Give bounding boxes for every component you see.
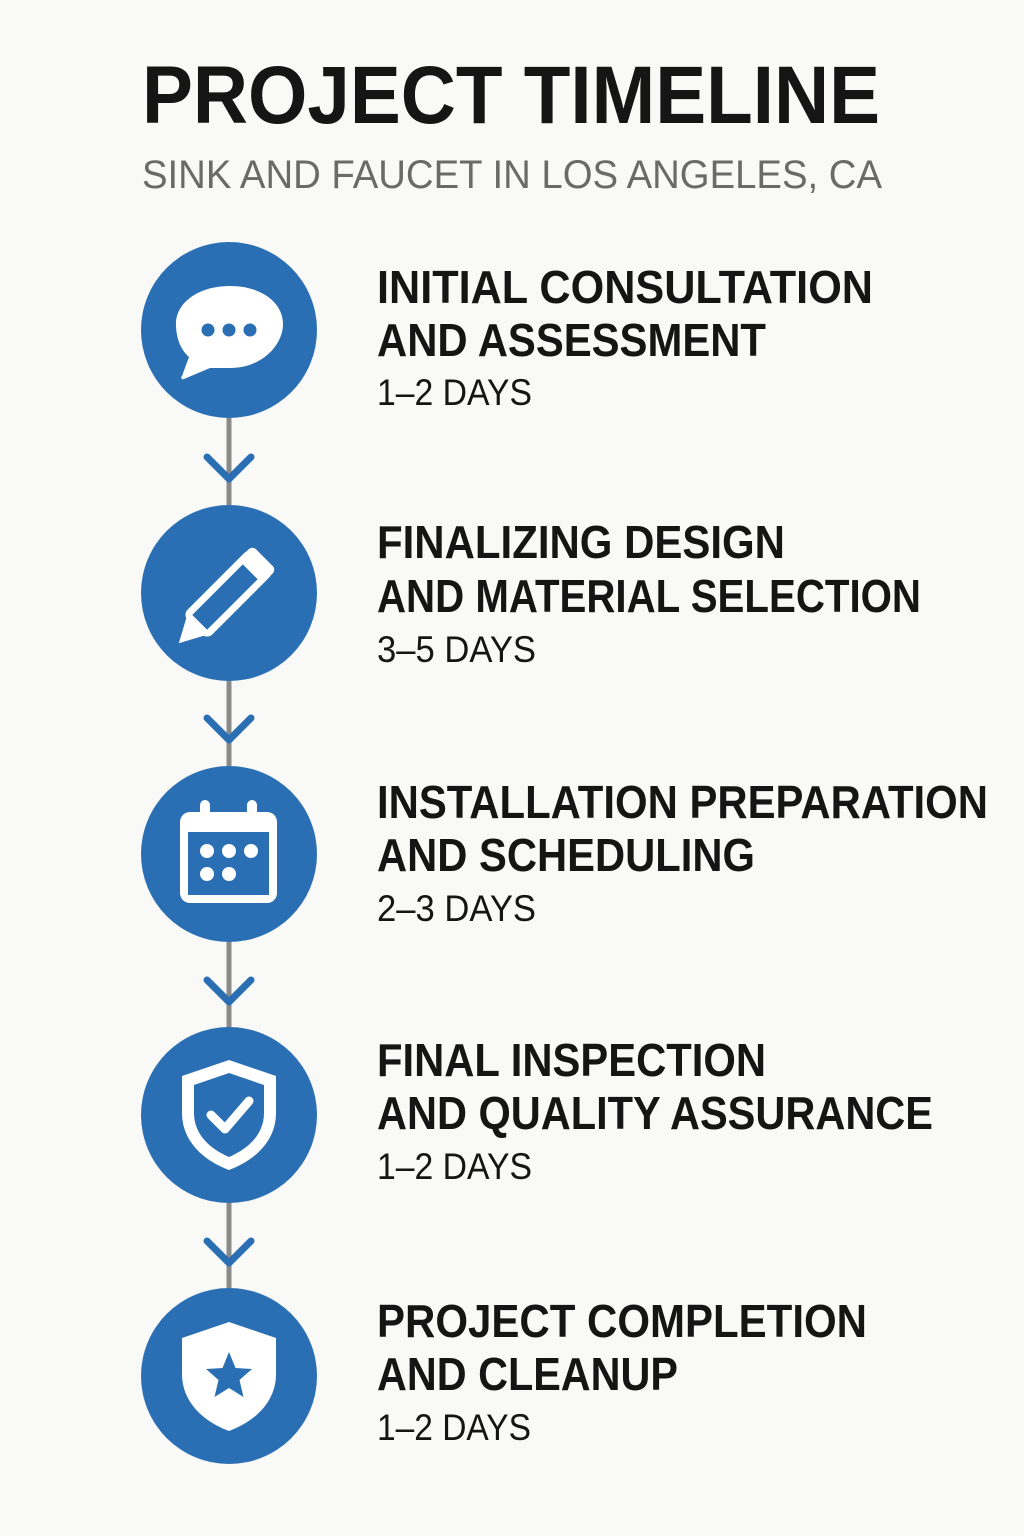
text: step 4: 1–2 DAYS (377, 1146, 532, 1187)
connectors and arrows (226, 418, 232, 1288)
step 3 (141, 766, 988, 942)
text: step 2: 3–5 DAYS (377, 629, 536, 670)
arrow 2 (207, 718, 251, 740)
text: step 1: INITIAL CONSULTATION (377, 261, 873, 313)
text: step 5: AND CLEANUP (377, 1348, 678, 1400)
text: step 5: PROJECT COMPLETION (377, 1295, 867, 1347)
text: step 4 (377, 1034, 933, 1187)
subtitle: SINK AND FAUCET IN LOS ANGELES, CA (142, 153, 882, 197)
text: step 5 (377, 1295, 867, 1448)
arrow 1 (207, 457, 251, 479)
text: step 4: AND QUALITY ASSURANCE (377, 1087, 933, 1139)
text: step 2: FINALIZING DESIGN (377, 516, 785, 568)
icon: shield star (141, 1288, 317, 1464)
icon: chat bubble (141, 242, 317, 418)
text: step 5: 1–2 DAYS (377, 1407, 531, 1448)
text: step 3 (377, 776, 988, 929)
step 4 (141, 1027, 933, 1203)
title: PROJECT TIMELINE (142, 50, 880, 141)
text: step 1: AND ASSESSMENT (377, 314, 766, 366)
icon: shield check (141, 1027, 317, 1203)
text: step 1 (377, 261, 873, 413)
arrow 4 (207, 1241, 251, 1263)
icon: pencil (141, 505, 317, 681)
step 2 (141, 505, 921, 681)
text: step 4: FINAL INSPECTION (377, 1034, 766, 1086)
text: step 3: 2–3 DAYS (377, 888, 536, 929)
text: step 2: AND MATERIAL SELECTION (377, 570, 921, 622)
text: step 1: 1–2 DAYS (377, 372, 532, 413)
text: step 2 (377, 516, 921, 670)
text: step 3: AND SCHEDULING (377, 829, 755, 881)
arrow 3 (207, 980, 251, 1002)
step 5 (141, 1288, 867, 1464)
step 1 (141, 242, 873, 418)
icon: calendar (141, 766, 317, 942)
